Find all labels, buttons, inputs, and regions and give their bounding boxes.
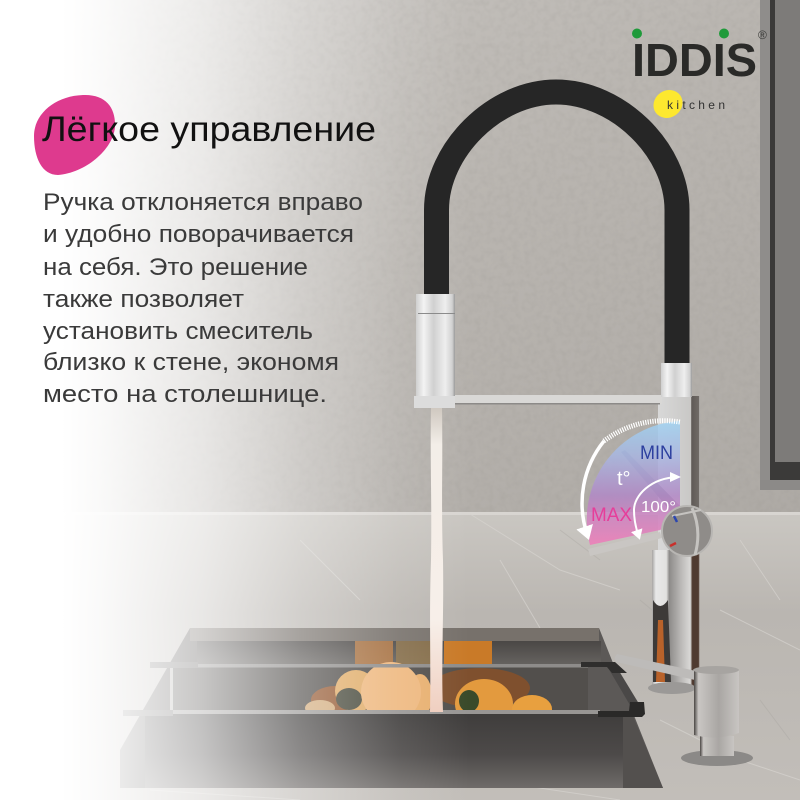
back rail: [170, 664, 588, 668]
body text: близко к стене, экономя: [43, 349, 339, 376]
body text: [43, 189, 363, 408]
faucet body lower: [652, 550, 700, 686]
sink basin outer: [120, 628, 663, 788]
dial: [662, 506, 712, 556]
thick white arrow: [582, 441, 604, 534]
inner arrow: [634, 477, 678, 534]
faucet base: [648, 682, 696, 694]
inner arrow head right: [670, 472, 681, 482]
body text: на себя. Это решение: [43, 254, 308, 281]
faucet: [414, 92, 700, 694]
head seam: [418, 313, 455, 314]
colored sector: [587, 421, 680, 545]
orange reflection: [656, 620, 665, 682]
body text: установить смеситель: [43, 318, 313, 345]
arm shadow: [455, 403, 660, 404]
dispenser base: [681, 750, 753, 766]
dispenser body: [694, 670, 739, 738]
body text: Ручка отклоняется вправо: [43, 189, 363, 216]
handle lever up: [621, 450, 684, 518]
soap dispenser: [615, 654, 753, 766]
kitchen: kitchen: [667, 98, 725, 112]
body text: также позволяет: [43, 286, 244, 313]
side rail left: [170, 667, 173, 711]
water stream: [430, 408, 443, 712]
front rail: [124, 710, 600, 714]
dispenser spout: [615, 654, 696, 680]
basket back panel: [170, 667, 588, 711]
registered mark: ®: [758, 28, 767, 42]
heading with pink blob: [34, 95, 376, 175]
wordmark: IDDIS: [632, 34, 757, 86]
handle lever down: [588, 532, 662, 556]
front panel: [145, 714, 623, 788]
green dot left: [632, 28, 642, 38]
back marble ledge: [190, 628, 599, 641]
body text: место на столешнице.: [43, 381, 327, 408]
chrome spray head: [416, 294, 455, 398]
yellow blob: [648, 84, 688, 124]
red mark: [670, 543, 676, 546]
logo: IDDIS kitchen: [632, 28, 767, 124]
tick arc: [604, 421, 680, 441]
title: Лёгкое управление: [42, 110, 376, 149]
dark reflection: [653, 600, 671, 682]
clip back right: [581, 662, 627, 673]
pink blob: [34, 95, 115, 175]
sink: [120, 628, 663, 788]
marble countertop: [0, 512, 800, 800]
white fade overlay: [0, 0, 470, 800]
flexible black hose: [436, 92, 677, 365]
MAX label: MAX: [591, 505, 632, 526]
horizontal arm: [455, 395, 662, 404]
clip back left: [150, 662, 198, 668]
temperature label: t°: [617, 468, 631, 490]
100 degree label: 100°: [641, 499, 676, 516]
right collar: [661, 363, 692, 397]
side rail right: [607, 666, 644, 712]
green dot right: [719, 28, 729, 38]
dispenser neck: [700, 736, 734, 756]
right inner wall: [623, 714, 663, 788]
fruit: [305, 662, 552, 710]
MIN label: MIN: [640, 443, 673, 464]
temperature diagram: [582, 421, 712, 556]
wall background: [0, 0, 800, 514]
window frame on wall: [760, 0, 800, 490]
dispenser top: [693, 666, 739, 674]
blue mark: [674, 516, 677, 522]
spout collar: [414, 396, 455, 408]
faucet body upper: [658, 396, 700, 556]
body text: и удобно поворачивается: [43, 221, 354, 248]
clip front left: [123, 710, 173, 716]
back wall with reflections: [197, 641, 601, 665]
clip front right: [598, 702, 645, 717]
